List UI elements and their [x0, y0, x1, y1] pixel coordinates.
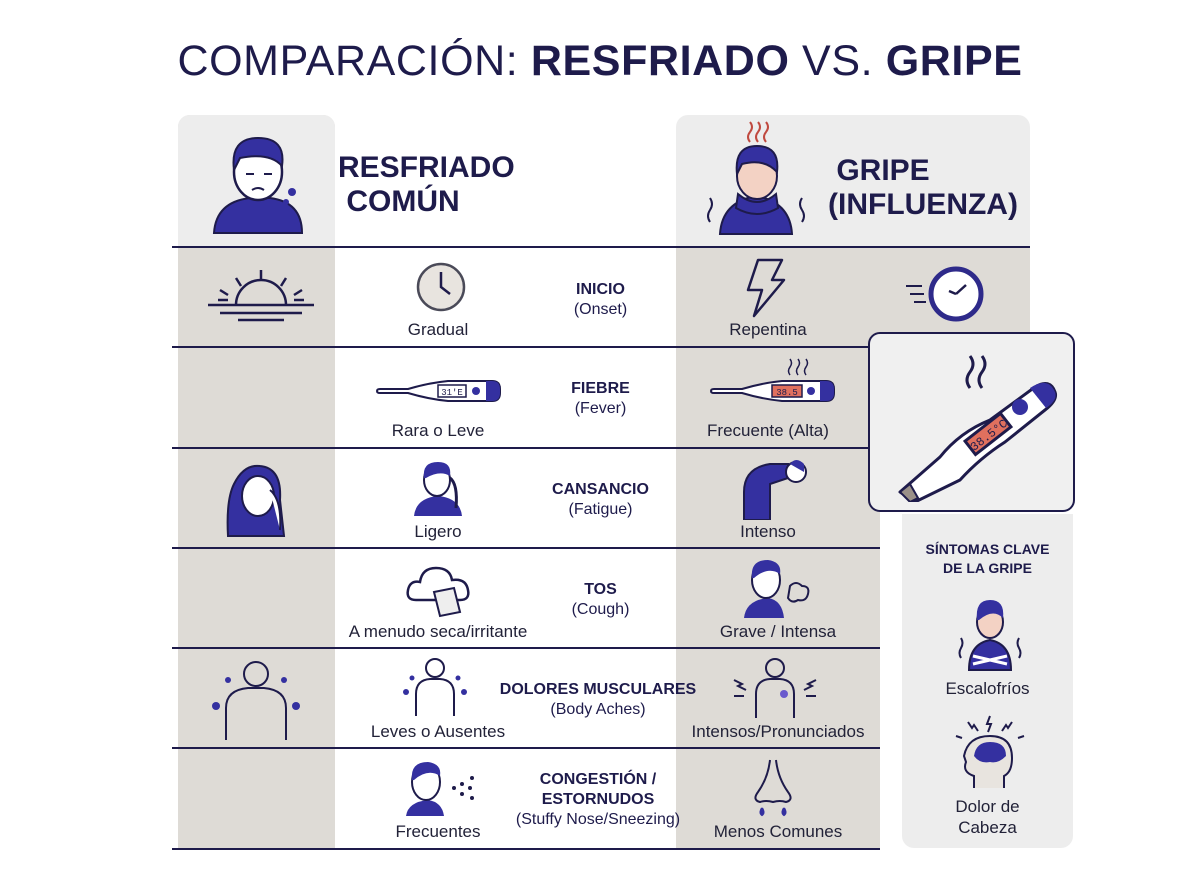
- row heading: [516, 770, 680, 828]
- text: escalofríos: Escalofríos: [945, 679, 1030, 698]
- row: congestion: [395, 760, 842, 841]
- row heading: (Fatigue): [568, 501, 633, 518]
- text: grave intensa: Grave / Intensa: [720, 622, 836, 641]
- icon: person sneezing: [212, 137, 303, 234]
- row heading: [552, 481, 649, 518]
- text: dolor de cabeza: Cabeza: [958, 818, 1017, 837]
- icon: tired person: [414, 462, 462, 516]
- row heading: (Cough): [572, 601, 629, 618]
- row heading: ESTORNUDOS: [542, 791, 654, 808]
- icon: body outline dots: [212, 661, 300, 740]
- row heading: (Body Aches): [550, 701, 646, 718]
- text: rara o leve: Rara o Leve: [392, 421, 484, 440]
- panel heading: DE LA GRIPE: [943, 560, 1032, 576]
- text: dolor de cabeza: [955, 797, 1020, 837]
- panel: síntomas clave de la gripe: [902, 514, 1073, 848]
- icon: sick person: [707, 121, 805, 235]
- title: COMPARACIÓN: RESFRIADO VS. GRIPE: [177, 37, 1023, 85]
- row heading: TOS: [584, 581, 617, 598]
- heading: (INFLUENZA): [828, 188, 1018, 221]
- text: frecuentes: Frecuentes: [395, 822, 481, 841]
- text: intensos: Intensos/Pronunciados: [692, 722, 864, 741]
- header: resfriado común: [212, 137, 515, 234]
- heading: GRIPE: [836, 154, 930, 187]
- icon: tired woman: [226, 464, 286, 537]
- icon: hot thermometer: [710, 358, 835, 402]
- card: big thermometer: [868, 332, 1075, 512]
- text: gradual: Gradual: [408, 320, 468, 339]
- row: dolores musculares: [212, 658, 864, 741]
- icon: clock: [416, 262, 466, 312]
- text: menos comunes: Menos Comunes: [714, 822, 842, 841]
- text: repentina: Repentina: [729, 320, 807, 339]
- text: dolor de cabeza: Dolor de: [955, 797, 1020, 816]
- row heading: (Fever): [575, 400, 626, 417]
- heading: RESFRIADO: [338, 151, 515, 184]
- row heading: [574, 281, 627, 318]
- row heading: [571, 380, 630, 417]
- row heading: [500, 681, 696, 718]
- icon: lightning: [746, 258, 786, 318]
- row heading: INICIO: [576, 281, 625, 298]
- row: cansancio: [226, 460, 807, 541]
- text: frecuente alta: Frecuente (Alta): [707, 421, 829, 440]
- text: ligero: Ligero: [414, 522, 462, 541]
- icon: nose: [754, 760, 792, 816]
- row: inicio: [208, 258, 984, 339]
- row heading: (Stuffy Nose/Sneezing): [516, 811, 680, 828]
- heading: COMÚN: [346, 185, 460, 218]
- icon: coughing person: [744, 560, 810, 618]
- icon: body small: [403, 658, 467, 716]
- row heading: CANSANCIO: [552, 481, 649, 498]
- icon: thermometer: [376, 380, 501, 402]
- header: gripe: [707, 121, 1018, 235]
- row heading: FIEBRE: [571, 380, 630, 397]
- icon: chills: [958, 600, 1022, 671]
- heading: [828, 154, 1018, 221]
- text: a menudo seca: A menudo seca/irritante: [349, 622, 527, 641]
- card: big thermometer: 38.5°C: [968, 417, 1011, 454]
- icon: fast clock: [906, 266, 984, 322]
- row heading: CONGESTIÓN /: [540, 771, 656, 788]
- icon: bent over person: [743, 460, 807, 520]
- icon: headache: [956, 716, 1024, 788]
- icon: body pain: [734, 658, 816, 718]
- heading: [338, 151, 515, 218]
- row heading: DOLORES MUSCULARES: [500, 681, 696, 698]
- panel heading: [926, 541, 1049, 576]
- row heading: [572, 581, 629, 618]
- panel heading: SÍNTOMAS CLAVE: [926, 541, 1049, 557]
- background columns: [178, 115, 335, 850]
- icon: sunrise: [208, 270, 314, 322]
- row: tos: [348, 560, 836, 641]
- row: fiebre: [376, 358, 835, 440]
- icon: hot thermometer: 38.5: [776, 388, 798, 398]
- text: leves o ausentes: Leves o Ausentes: [371, 722, 505, 741]
- row heading: (Onset): [574, 301, 627, 318]
- icon: sneezing: [406, 762, 474, 816]
- icon: cloud tissue: [406, 566, 470, 618]
- text: intenso: Intenso: [740, 522, 796, 541]
- icon: thermometer: 31'E: [441, 388, 463, 398]
